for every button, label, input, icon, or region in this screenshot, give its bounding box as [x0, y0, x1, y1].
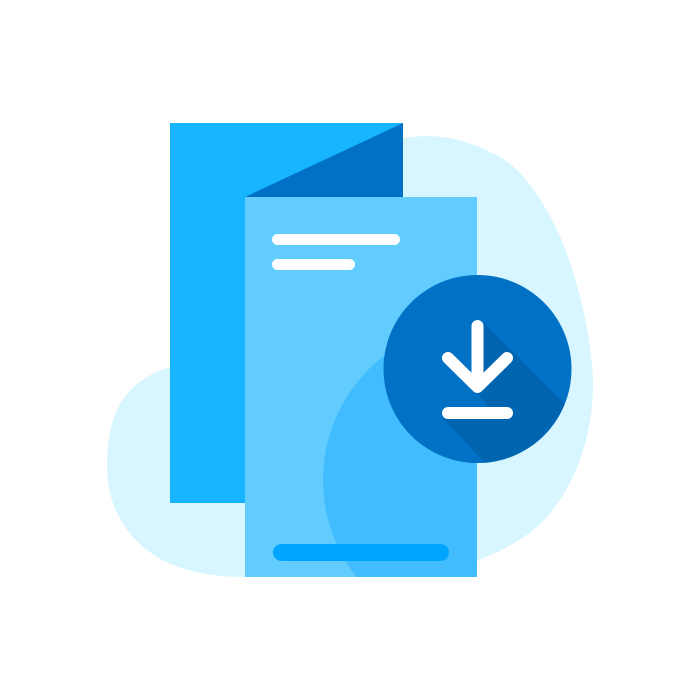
long shadow [443, 322, 565, 463]
button bar [273, 544, 449, 561]
brochure fold [245, 123, 403, 197]
heading line 1 [272, 234, 400, 245]
heading line 2 [272, 259, 355, 270]
brochure back panel [170, 123, 403, 503]
illustration: download brochure [107, 123, 593, 577]
front panel circle accent [323, 356, 477, 577]
background blob [107, 136, 593, 577]
download badge [384, 275, 572, 463]
icon: download arrow [448, 326, 507, 413]
badge circle [384, 275, 572, 463]
brochure front panel [245, 197, 477, 577]
